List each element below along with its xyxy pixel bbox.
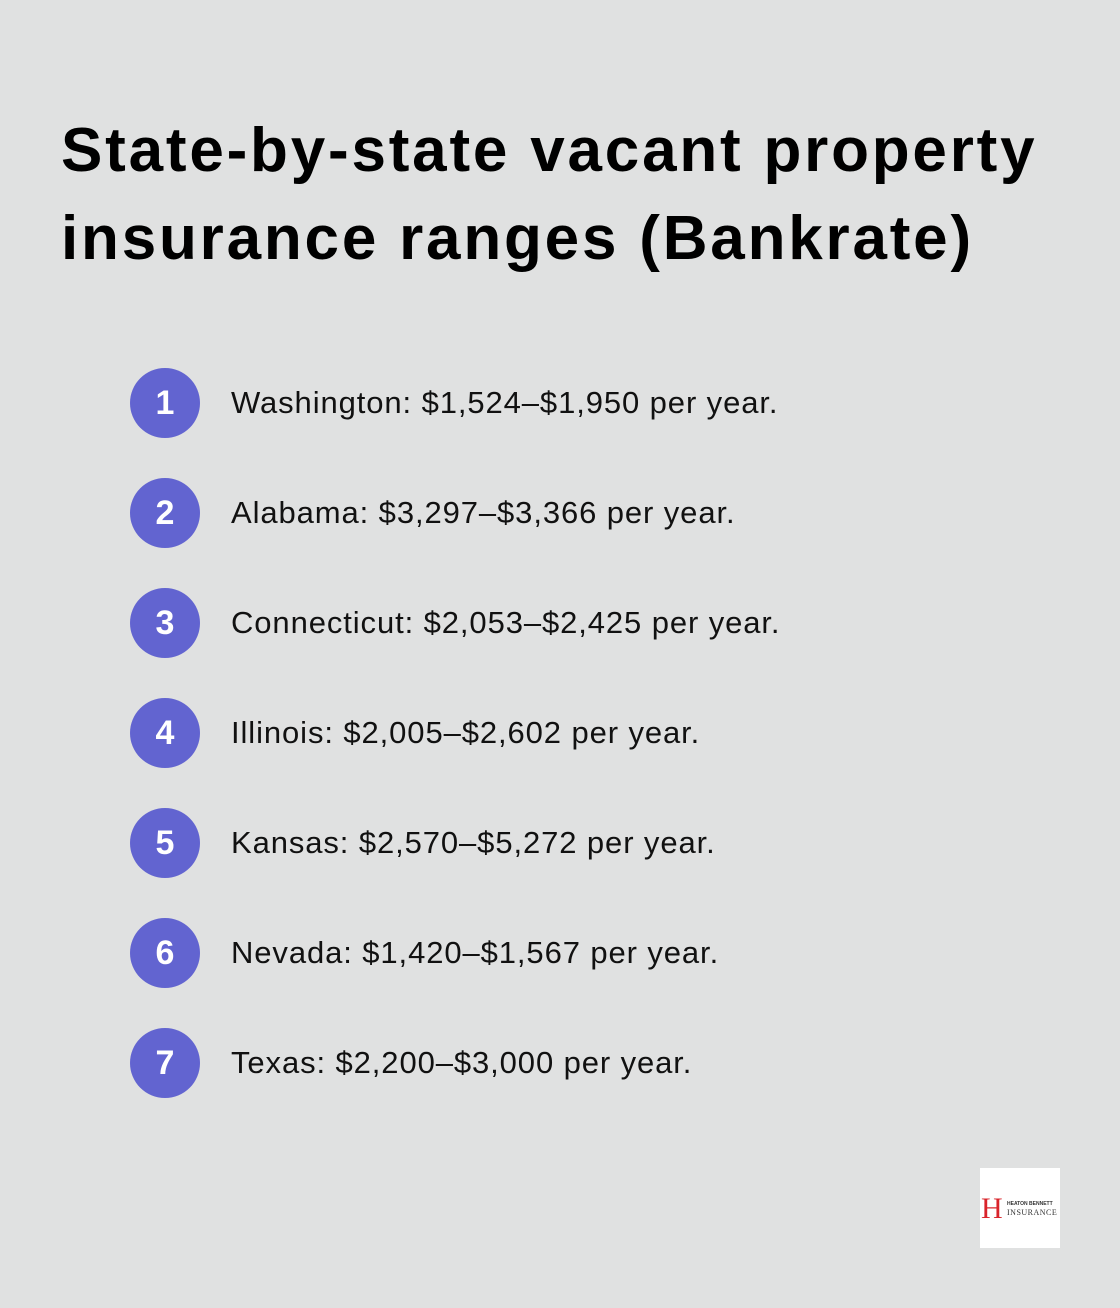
item 4: 4 (156, 714, 174, 752)
item 1 (130, 368, 778, 438)
item 5 (130, 808, 716, 878)
logo: HEATON BENNETT (1007, 1201, 1053, 1207)
item 3 (130, 588, 780, 658)
item 1: 1 (156, 384, 174, 422)
logo (980, 1168, 1060, 1248)
item 7: Texas: $2,200–$3,000 per year. (231, 1045, 692, 1080)
item 3: Connecticut: $2,053–$2,425 per year. (231, 605, 780, 640)
item 6: Nevada: $1,420–$1,567 per year. (231, 935, 719, 970)
logo: H (981, 1192, 1003, 1225)
title (61, 116, 1037, 273)
logo: INSURANCE (1007, 1208, 1057, 1217)
item 2: Alabama: $3,297–$3,366 per year. (231, 495, 736, 530)
item 1: Washington: $1,524–$1,950 per year. (231, 385, 778, 420)
item 2 (130, 478, 736, 548)
item 7: 7 (156, 1044, 174, 1082)
item 7 (130, 1028, 692, 1098)
item 5: Kansas: $2,570–$5,272 per year. (231, 825, 716, 860)
item 4: Illinois: $2,005–$2,602 per year. (231, 715, 700, 750)
title: State-by-state vacant property (61, 116, 1037, 185)
item 6 (130, 918, 719, 988)
item 2: 2 (156, 494, 174, 532)
item 5: 5 (156, 824, 174, 862)
item 3: 3 (156, 604, 174, 642)
title: insurance ranges (Bankrate) (61, 204, 974, 273)
item 4 (130, 698, 700, 768)
item 6: 6 (156, 934, 174, 972)
